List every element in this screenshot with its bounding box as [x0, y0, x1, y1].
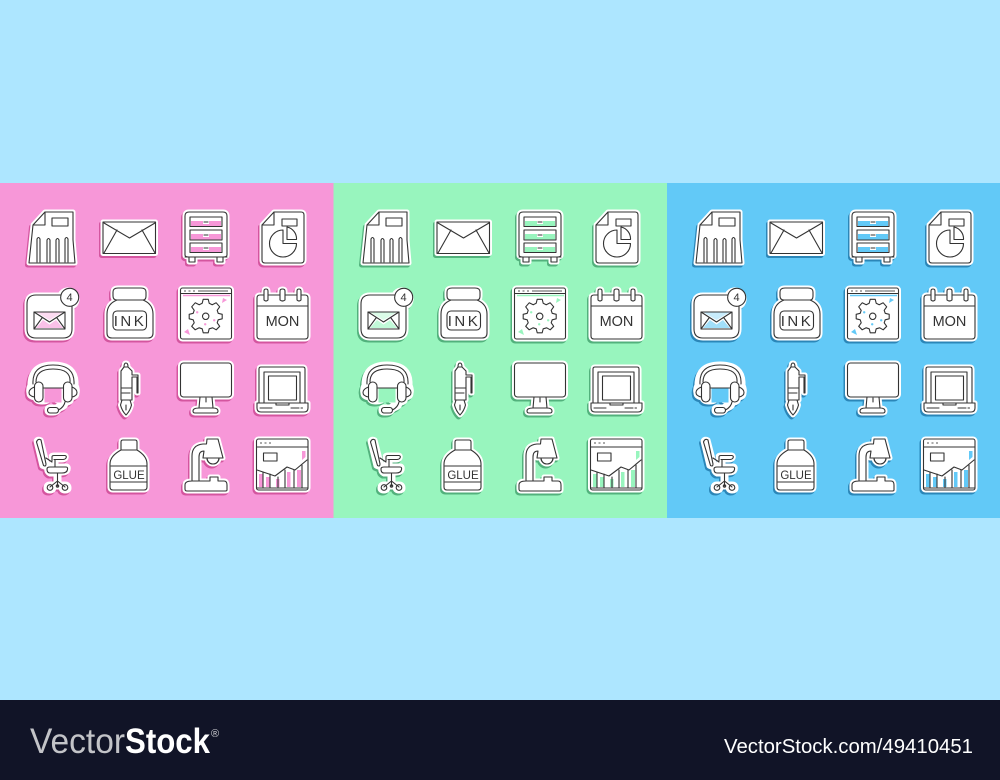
- icon: laptop: [256, 367, 308, 414]
- icon: shredder: [362, 212, 409, 265]
- icon: envelope: [436, 222, 490, 256]
- icon: headset: [694, 364, 744, 415]
- icon: office chair: [702, 439, 736, 493]
- icon: ink bottle: [106, 288, 153, 340]
- icon: laptop: [922, 367, 975, 414]
- icon: shredder: [694, 212, 742, 265]
- icon: browser analytics chart: [255, 439, 308, 492]
- icon: pie chart document: [928, 212, 971, 265]
- icon: ink bottle: [772, 288, 820, 340]
- icon: desk lamp: [518, 439, 561, 493]
- icon: browser settings gear: [846, 288, 898, 341]
- icon: filing cabinet: [518, 212, 561, 264]
- icon: mail notification: [26, 288, 79, 340]
- icon: headset: [27, 364, 77, 415]
- icon: envelope: [102, 222, 156, 256]
- icon: pie chart document: [594, 212, 638, 265]
- icon: laptop: [590, 367, 642, 414]
- icon: fountain pen: [786, 363, 805, 417]
- icon: Monday calendar: [256, 289, 308, 341]
- icon: shredder: [28, 212, 75, 265]
- panel: pink icon set: [0, 183, 334, 518]
- icon: browser analytics chart: [922, 439, 975, 492]
- icon: desk lamp: [850, 439, 894, 493]
- icon: ink bottle: [440, 288, 487, 340]
- icon: glue bottle: [442, 440, 481, 492]
- icon: computer monitor: [179, 363, 232, 415]
- icon: mail notification: 4: [400, 292, 407, 304]
- icon: fountain pen: [453, 363, 472, 417]
- icon: computer monitor: [513, 363, 566, 415]
- icon: office chair: [368, 439, 403, 493]
- icon: fountain pen: [119, 363, 138, 417]
- icon: ink bottle: INK: [114, 313, 146, 330]
- icon: glue bottle: GLUE: [113, 470, 145, 482]
- icon: mail notification: 4: [66, 292, 73, 304]
- icon: Monday calendar: [590, 289, 642, 341]
- icon: envelope: [768, 222, 822, 256]
- icon: ink bottle: INK: [781, 313, 813, 330]
- icon: headset: [361, 364, 411, 415]
- icon: browser settings gear: [179, 288, 232, 341]
- icon: filing cabinet: [184, 212, 227, 264]
- icon: Monday calendar: [922, 289, 975, 341]
- icon: Monday calendar: MON: [266, 314, 299, 330]
- icon: computer monitor: [846, 363, 898, 415]
- icon: mail notification: [692, 288, 746, 340]
- icon: mail notification: [360, 288, 413, 340]
- icon: filing cabinet: [850, 212, 894, 264]
- icon: glue bottle: GLUE: [780, 470, 812, 482]
- logo: VectorStock: ®: [211, 728, 219, 740]
- icon: Monday calendar: MON: [933, 314, 966, 330]
- icon: pie chart document: [260, 212, 304, 265]
- image id caption: VectorStock.com/49410451: [724, 736, 973, 758]
- icon: glue bottle: GLUE: [447, 470, 479, 482]
- logo: VectorStock: Vector: [30, 722, 125, 761]
- icon: Monday calendar: MON: [600, 314, 633, 330]
- panel: green icon set: [334, 183, 667, 518]
- icon: browser analytics chart: [589, 439, 642, 492]
- icon: desk lamp: [184, 439, 227, 493]
- icon: mail notification: 4: [733, 292, 740, 304]
- footer bar: [0, 700, 1000, 780]
- icon: ink bottle: INK: [448, 313, 480, 330]
- icon: office chair: [34, 439, 69, 493]
- icon: glue bottle: [776, 440, 814, 492]
- logo: VectorStock: [30, 722, 219, 761]
- icon: glue bottle: [108, 440, 147, 492]
- panel: blue icon set: [667, 183, 1000, 518]
- icon: browser settings gear: [513, 288, 566, 341]
- logo: VectorStock: Stock: [125, 722, 210, 761]
